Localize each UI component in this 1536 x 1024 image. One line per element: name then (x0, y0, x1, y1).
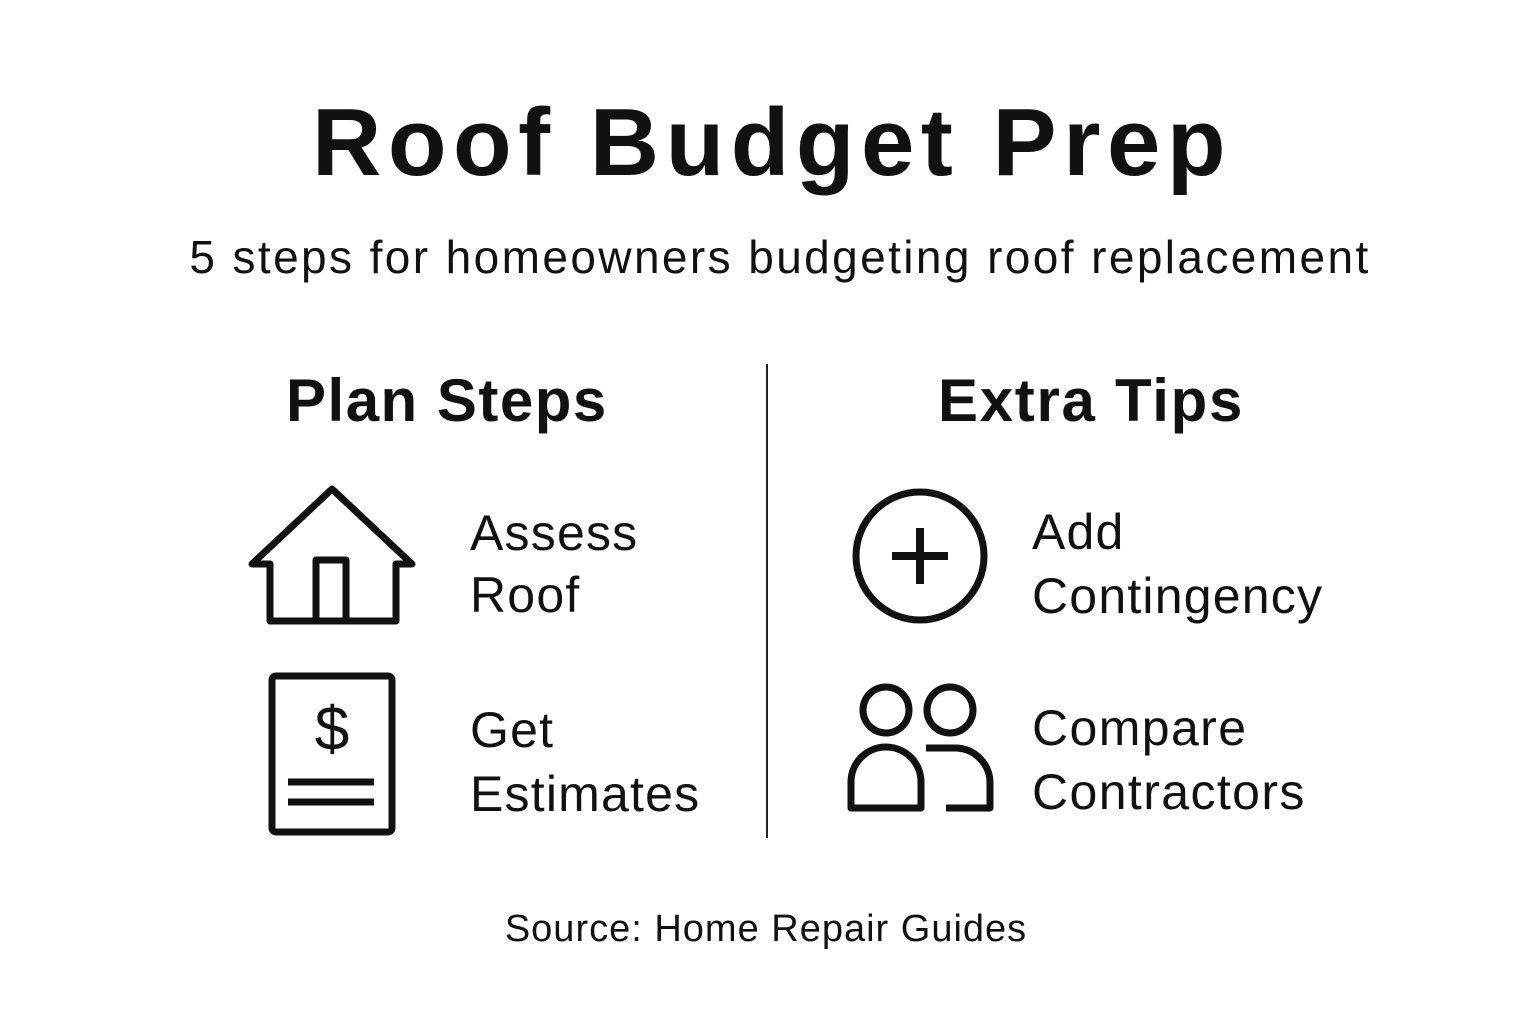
divider (766, 364, 768, 838)
icon: plus circle (852, 488, 988, 624)
text: assess roof (470, 505, 638, 623)
text: get estimates: Estimates (470, 766, 700, 822)
title: Roof Budget Prep (312, 89, 1232, 196)
heading: extra tips: Extra Tips (938, 367, 1244, 434)
text: add contingency: Contingency (1032, 568, 1323, 624)
text: get estimates: Get (470, 702, 554, 758)
icon: estimate doc: $ (315, 695, 349, 764)
text: add contingency (1032, 504, 1323, 624)
text: assess roof: Roof (470, 567, 580, 623)
icon: people (848, 684, 994, 812)
icon: house (248, 486, 416, 624)
heading: plan steps: Plan Steps (286, 367, 608, 434)
source: Source: Home Repair Guides (505, 908, 1027, 950)
text: assess roof: Assess (470, 505, 638, 561)
icon: estimate doc (268, 672, 396, 836)
text: add contingency: Add (1032, 504, 1125, 560)
text: compare contractors (1032, 700, 1306, 820)
text: get estimates (470, 702, 700, 822)
subtitle: 5 steps for homeowners budgeting roof replacement (189, 231, 1371, 283)
text: compare contractors: Compare (1032, 700, 1247, 756)
text: compare contractors: Contractors (1032, 764, 1306, 820)
